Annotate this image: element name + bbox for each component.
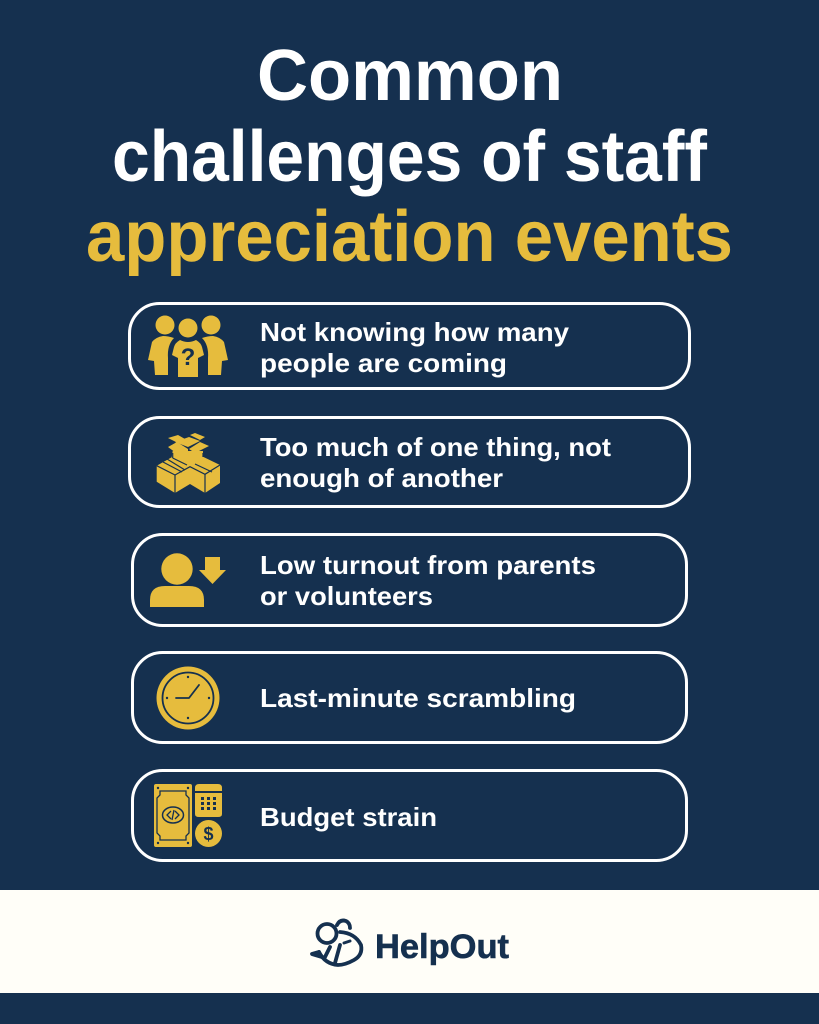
text: not knowing how many people are coming: people are coming — [260, 348, 507, 378]
icon: bee — [312, 920, 361, 965]
text: not knowing how many people are coming — [260, 317, 570, 378]
text: not knowing how many people are coming: Not knowing how many — [260, 317, 570, 347]
icon: group of people with question mark: ? — [181, 344, 195, 371]
wordmark: HelpOut — [375, 928, 509, 966]
icon: stacked boxes — [157, 433, 220, 493]
icon: money, calendar and coin: $ — [203, 824, 214, 844]
logo: HelpOut — [312, 920, 509, 966]
text: low turnout from parents or volunteers — [260, 550, 596, 611]
text: low turnout from parents or volunteers: or volunteers — [260, 581, 433, 611]
text: last-minute scrambling: Last-minute scrambling — [260, 683, 576, 713]
icon: group of people with question mark — [148, 316, 228, 377]
panel: not knowing how many are coming — [130, 304, 690, 388]
text: budget strain: Budget strain — [260, 802, 437, 832]
panel: last-minute scrambling — [132, 652, 686, 742]
title: Common — [257, 36, 563, 116]
panel: budget strain — [132, 770, 686, 860]
icon: money, calendar and coin — [154, 784, 222, 847]
text: low turnout from parents or volunteers: Low turnout from parents — [260, 550, 596, 580]
panel: too much of one thing — [130, 418, 690, 506]
title: challenges of staff — [112, 117, 708, 197]
text: too much of one thing, not enough of another: Too much of one thing, not — [260, 432, 611, 462]
text: too much of one thing, not enough of another — [260, 432, 611, 493]
title — [86, 36, 733, 277]
icon: clock — [156, 666, 220, 730]
text: too much of one thing, not enough of another: enough of another — [260, 463, 503, 493]
footer band — [0, 890, 819, 993]
title: appreciation events — [86, 197, 733, 277]
panel: low turnout — [132, 534, 686, 626]
icon: person with down arrow — [150, 553, 226, 607]
